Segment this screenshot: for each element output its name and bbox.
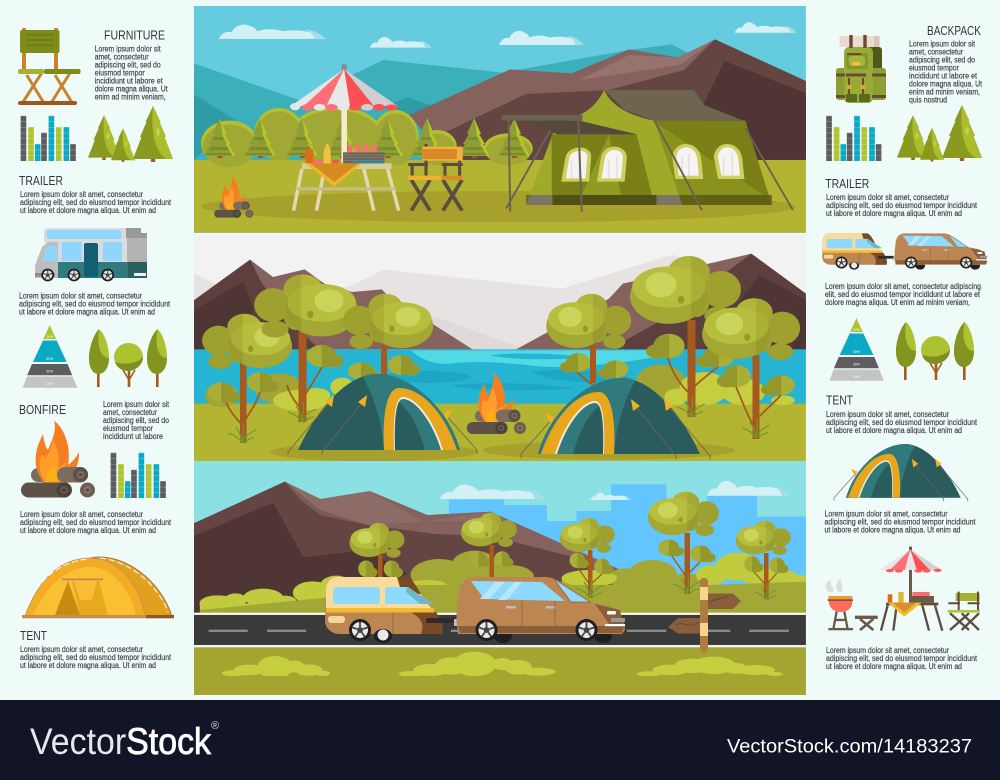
text: backpack description: amet, consectetur	[909, 48, 963, 56]
text: bonfire notes: Lorem ipsum dolor sit amet, consectetur	[20, 510, 143, 519]
icon: bonfire	[21, 421, 95, 498]
icon: campfire	[214, 177, 253, 218]
heading: bonfire: BONFIRE	[19, 402, 66, 417]
text: yellow tent description: adipiscing elit, sed do eiusmod tempor incididunt	[20, 653, 172, 662]
text: tent description: adipiscing elit, sed do eiusmod tempor incididunt	[826, 418, 978, 427]
chart: pyramid percentages: 50%	[853, 350, 860, 354]
text: bonfire description: Lorem ipsum dolor sit	[103, 400, 170, 409]
text: furniture description: Lorem ipsum dolor sit	[95, 44, 161, 54]
bar chart: equalizer	[829, 116, 879, 161]
text: camper description: ut labore et dolore magna aliqua. Ut enim ad	[19, 308, 155, 316]
chart: pyramid percentages: 50%	[46, 357, 53, 361]
icon: round trees	[89, 329, 167, 387]
text: yellow tent description: Lorem ipsum dolor sit amet, consectetur	[20, 645, 143, 654]
icon: folding chair	[18, 28, 80, 105]
bar chart: equalizer	[113, 453, 163, 498]
text: picnic description: ut labore et dolore magna aliqua. Ut enim ad	[826, 662, 962, 671]
right column: tent section	[824, 392, 978, 534]
text: camper description	[19, 292, 171, 316]
icon: dome tent	[834, 444, 968, 501]
left column: yellow tent section	[20, 557, 174, 670]
left column: furniture section	[18, 28, 173, 162]
text: trailer description: ut labore et dolore magna aliqua. Ut enim ad	[20, 206, 156, 215]
text: furniture description: enim ad minim veniam,	[95, 92, 166, 102]
icon: pine trees	[897, 105, 982, 162]
text: yellow tent description	[20, 645, 172, 670]
text: picnic description: adipiscing elit, sed do eiusmod tempor incididunt	[826, 654, 978, 663]
text: furniture description: dolore magna aliqua. Ut	[95, 84, 168, 94]
campfire between the tents	[467, 373, 526, 434]
text: tent notes: Lorem ipsum dolor sit amet, consectetur	[824, 510, 948, 518]
text: backpack description: incididunt ut labore et	[909, 72, 978, 80]
chart: pyramid percentages: 10%	[46, 335, 53, 339]
scenery: sky, mountains and lake	[194, 232, 806, 462]
text: backpack description: quis nostrud	[909, 96, 947, 104]
large green family tent	[501, 90, 793, 212]
text: camper description: Lorem ipsum dolor sit amet, consectetur	[19, 292, 142, 300]
text: furniture description: incididunt ut labore et	[95, 76, 163, 86]
panel: road trip scene	[194, 460, 811, 695]
text: bonfire description: incididunt ut labore	[103, 432, 163, 441]
text: backpack description	[909, 40, 983, 104]
text: furniture description	[95, 44, 168, 102]
icon: backpack	[836, 35, 886, 103]
text: tent description: Lorem ipsum dolor sit amet, consectetur	[826, 410, 949, 419]
text: picnic description	[826, 646, 978, 671]
text: picnic description: Lorem ipsum dolor sit amet, consectetur	[826, 646, 949, 655]
scenery: sky, city, mountains and road	[194, 460, 811, 695]
text: bonfire description	[103, 400, 170, 441]
text: bonfire notes: ut labore et dolore magna aliqua. Ut enim ad	[20, 526, 156, 535]
text: backpack description: eiusmod tempor	[909, 64, 959, 72]
logo registered mark: ®	[211, 720, 219, 732]
signpost	[668, 578, 741, 653]
heading: backpack: BACKPACK	[927, 23, 981, 38]
text: bonfire notes: adipiscing elit, sed do eiusmod tempor incididunt	[20, 518, 172, 527]
chart: pyramid percentages: 30%	[46, 370, 53, 374]
left dome tent	[288, 374, 477, 455]
text: vehicle notes: Lorem ipsum dolor sit amet, consectetur adipiscing	[825, 282, 981, 291]
text: tent notes: adipiscing elit, sed do eiusmod tempor incididunt	[824, 518, 976, 526]
text: trailer description: adipiscing elit, sed do eiusmod tempor incididunt	[826, 201, 978, 210]
icon: picnic set with grill, table, umbrella and chair	[825, 547, 980, 631]
caravan and car	[325, 577, 625, 643]
chart: pyramid percentages	[23, 325, 77, 388]
logo text: VectorStock	[30, 721, 211, 762]
tree group left of the lake	[198, 272, 433, 443]
chart: pyramid percentages: 30%	[853, 362, 860, 366]
text: tent notes: ut labore et dolore magna aliqua. Ut enim ad	[824, 526, 960, 534]
icon: camper van	[35, 228, 147, 281]
heading: tent: TENT	[826, 392, 853, 408]
panel: lakeside picnic and large tent scene	[194, 5, 806, 235]
text: bonfire description: eiusmod tempor	[103, 424, 153, 433]
left column: trailer section	[19, 173, 172, 388]
text: backpack description: Lorem ipsum dolor sit	[909, 40, 976, 48]
chart: pyramid percentages: 10%	[853, 375, 860, 379]
text: tent description: ut labore et dolore magna aliqua. Ut enim ad	[826, 426, 962, 435]
text: trailer description: Lorem ipsum dolor sit amet, consectetur	[826, 193, 949, 202]
icon: pine trees	[88, 106, 173, 162]
text: trailer description	[20, 190, 172, 215]
chart: pyramid percentages: 10%	[46, 382, 53, 386]
text: tent description	[826, 410, 978, 435]
right dome tent	[521, 378, 710, 459]
text: backpack description: adipiscing elit, sed do	[909, 56, 976, 64]
scenery: sky, mountains and ground	[194, 5, 806, 235]
text: bonfire notes	[20, 510, 172, 535]
text: furniture description: adipiscing elit, sed do	[95, 60, 161, 70]
heading: trailer: TRAILER	[825, 176, 869, 191]
icon: round trees	[896, 322, 974, 380]
text: vehicle notes	[825, 282, 981, 307]
text: furniture description: eiusmod tempor	[95, 68, 145, 78]
text: trailer description: Lorem ipsum dolor sit amet, consectetur	[20, 190, 143, 199]
image id: VectorStock.com/14183237	[727, 737, 972, 758]
chart: pyramid percentages	[829, 318, 884, 381]
picnic umbrella, table and chair	[290, 64, 463, 211]
heading: tent: TENT	[20, 628, 47, 643]
text: yellow tent description: ut labore et dolore magna aliqua. Ut enim ad	[20, 661, 156, 670]
text: vehicle notes: dolore magna aliqua. Ut enim ad minim veniam,	[825, 298, 970, 307]
footer band	[0, 700, 1000, 780]
text: backpack description: dolore magna aliqua. Ut	[909, 80, 983, 88]
text: furniture description: amet, consectetur	[95, 52, 149, 62]
text: backpack description: enim ad minim veniam,	[909, 88, 980, 96]
text: bonfire description: adipiscing elit, sed do	[103, 416, 170, 425]
tree group right of the lake	[546, 254, 805, 439]
text: camper description: adipiscing elit, sed do eiusmod tempor incididunt	[19, 300, 171, 308]
text: tent notes	[824, 510, 976, 534]
right column: trailer section	[822, 176, 987, 381]
bar chart: equalizer	[23, 116, 73, 161]
icon: caravan and car	[822, 233, 987, 270]
left column: bonfire section	[19, 400, 172, 535]
chart: pyramid percentages: 10%	[853, 328, 860, 332]
icon: yellow tent	[22, 557, 174, 618]
text: bonfire description: amet, consectetur	[103, 408, 157, 417]
text: trailer description: ut labore et dolore magna aliqua. Ut enim ad	[826, 209, 962, 218]
heading: furniture: FURNITURE	[104, 28, 165, 42]
text: trailer description	[826, 193, 978, 218]
text: vehicle notes: elit, sed do eiusmod tempor incididunt ut labore et	[825, 290, 981, 299]
pine tree row	[204, 118, 530, 158]
heading: trailer: TRAILER	[19, 173, 63, 188]
panel: lake campsite scene	[194, 232, 806, 462]
text: trailer description: adipiscing elit, sed do eiusmod tempor incididunt	[20, 198, 172, 207]
right column: backpack section	[829, 23, 983, 162]
roadside trees	[349, 490, 794, 600]
